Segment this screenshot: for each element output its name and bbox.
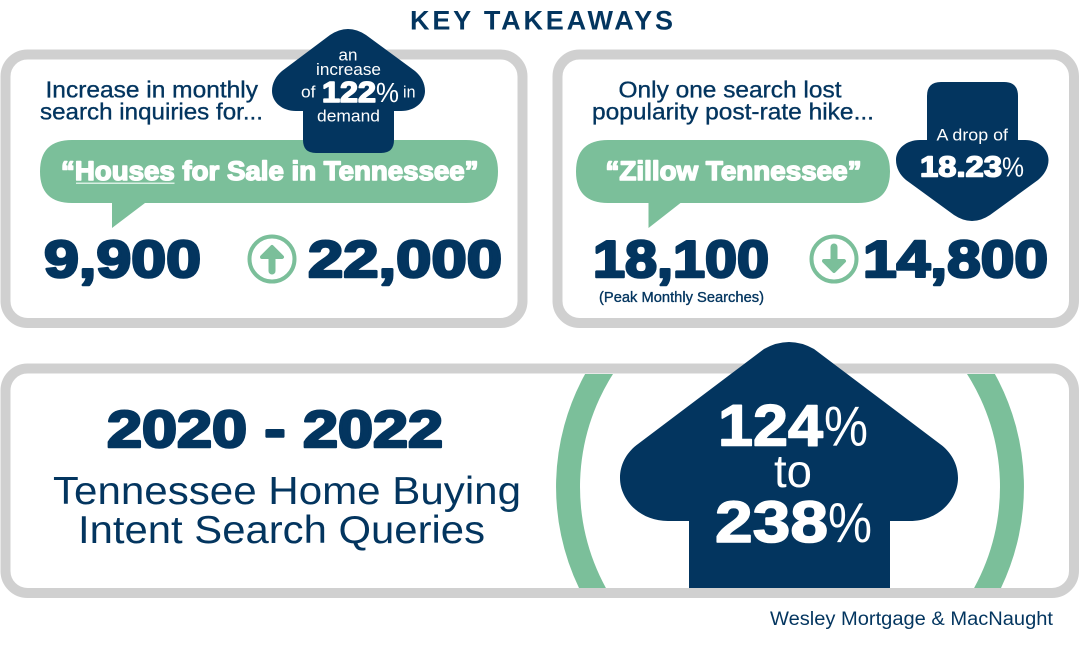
icon: down arrow callout: A drop of	[936, 126, 1008, 144]
icon: large up arrow: 238	[715, 490, 828, 555]
icon: up arrow callout: increase	[316, 60, 381, 79]
icon: down arrow callout: %	[1002, 152, 1024, 182]
intro text: Only one search lost	[618, 76, 842, 102]
icon: down arrow callout	[896, 82, 1048, 221]
green ring arcs	[556, 374, 1024, 588]
speech bubble	[576, 140, 890, 228]
speech bubble: “Houses for Sale in Tennessee”	[61, 156, 479, 186]
icon: large up arrow: 124	[718, 394, 823, 458]
panel frame	[558, 54, 1074, 323]
panel frame	[6, 54, 522, 323]
icon: large up arrow: to	[774, 445, 812, 497]
speech bubble: “Zillow Tennessee”	[606, 156, 862, 186]
panel: houses for sale	[6, 29, 522, 323]
panel: home buying intent	[6, 342, 1074, 593]
number: before: 18,100	[593, 231, 769, 289]
title: KEY TAKEAWAYS	[410, 6, 673, 36]
intro text	[40, 76, 263, 124]
intro text: popularity post-rate hike...	[592, 98, 874, 124]
source credit: Wesley Mortgage & MacNaught	[770, 609, 1054, 630]
intro text	[592, 76, 874, 124]
icon: circled up arrow	[250, 236, 294, 282]
intro text: Increase in monthly	[46, 76, 259, 102]
icon: large up arrow: %	[828, 491, 872, 555]
subtitle	[53, 470, 521, 552]
icon: up arrow callout: in	[403, 82, 416, 102]
icon: circled down arrow	[812, 236, 856, 282]
number: after: 14,800	[863, 231, 1048, 289]
icon: large up arrow: %	[824, 394, 868, 458]
number: before: 9,900	[44, 231, 201, 289]
icon: up arrow callout: demand	[317, 106, 380, 126]
number: after: 22,000	[308, 231, 502, 289]
panel frame	[6, 368, 1074, 593]
subtitle: Intent Search Queries	[78, 509, 485, 552]
intro text: search inquiries for...	[40, 98, 263, 124]
speech bubble	[40, 140, 498, 228]
caption: (Peak Monthly Searches)	[599, 290, 764, 306]
icon: up arrow callout: %	[376, 77, 399, 108]
icon: up arrow callout	[272, 29, 425, 153]
panel: zillow tennessee	[558, 54, 1074, 323]
subtitle: Tennessee Home Buying	[53, 470, 521, 513]
icon: large up arrow	[620, 342, 958, 588]
icon: up arrow callout: of	[301, 82, 316, 102]
icon: up arrow callout: an	[339, 46, 357, 64]
icon: down arrow callout: 18.23	[920, 152, 1002, 184]
date range heading: 2020 - 2022	[107, 401, 443, 459]
icon: up arrow callout: 122	[322, 77, 376, 109]
